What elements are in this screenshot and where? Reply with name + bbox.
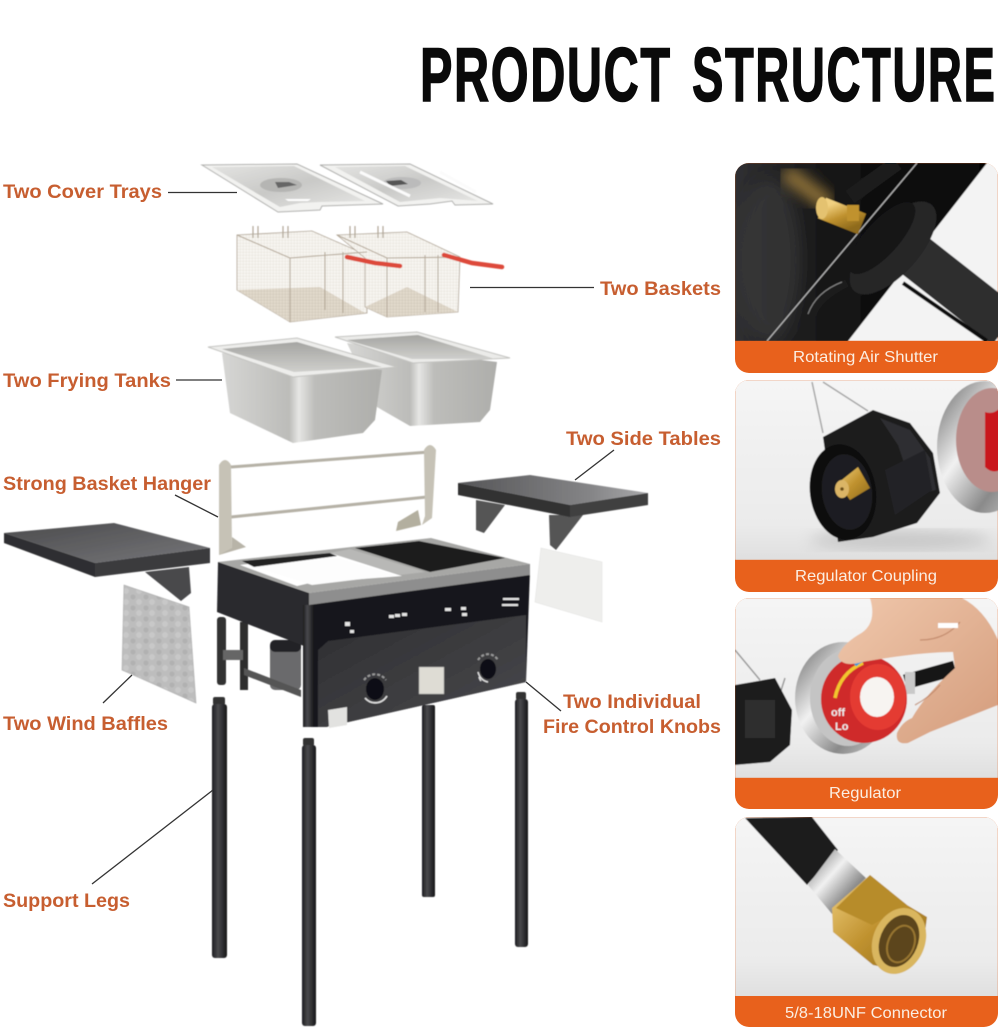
side table left (4, 523, 210, 601)
title: STRUCTURE (692, 34, 996, 118)
panel: regulator coupling (735, 380, 1000, 592)
title (420, 32, 996, 118)
panel: regulator: Lo (835, 721, 849, 733)
caption: Regulator (829, 785, 902, 802)
labels: Two Cover Trays (3, 182, 162, 203)
panel: rotating air shutter (735, 163, 1000, 373)
two cover trays (202, 164, 493, 212)
strong basket hanger (219, 445, 436, 555)
labels: Two Side Tables (566, 429, 721, 450)
fire control knob right (478, 654, 498, 682)
two frying tanks (208, 332, 510, 443)
panel: connector (735, 817, 998, 1027)
caption: Regulator Coupling (795, 568, 937, 585)
small label (328, 707, 347, 728)
wind baffle right (535, 548, 602, 622)
labels: Two Wind Baffles (3, 714, 168, 735)
leader lines (92, 192, 614, 884)
panel: regulator: off (831, 707, 845, 719)
panel: regulator (735, 598, 998, 809)
fire control knob left (364, 674, 387, 703)
wind baffle left (122, 585, 196, 703)
caption: Rotating Air Shutter (793, 349, 939, 366)
labels: Two Baskets (600, 279, 721, 300)
labels: Fire Control Knobs (543, 717, 721, 738)
two baskets (237, 226, 502, 322)
side table right (458, 475, 648, 550)
fryer body (217, 538, 530, 728)
labels (3, 182, 721, 912)
labels: Two Individual (563, 692, 701, 713)
product: exploded fryer (4, 164, 648, 1026)
labels: Support Legs (3, 891, 130, 912)
caption: 5/8-18UNF Connector (785, 1005, 948, 1022)
labels: Two Frying Tanks (3, 371, 171, 392)
label plate (419, 667, 444, 694)
title: PRODUCT (420, 32, 672, 118)
labels: Strong Basket Hanger (3, 474, 212, 495)
hand (838, 598, 998, 743)
support legs (212, 692, 528, 1026)
